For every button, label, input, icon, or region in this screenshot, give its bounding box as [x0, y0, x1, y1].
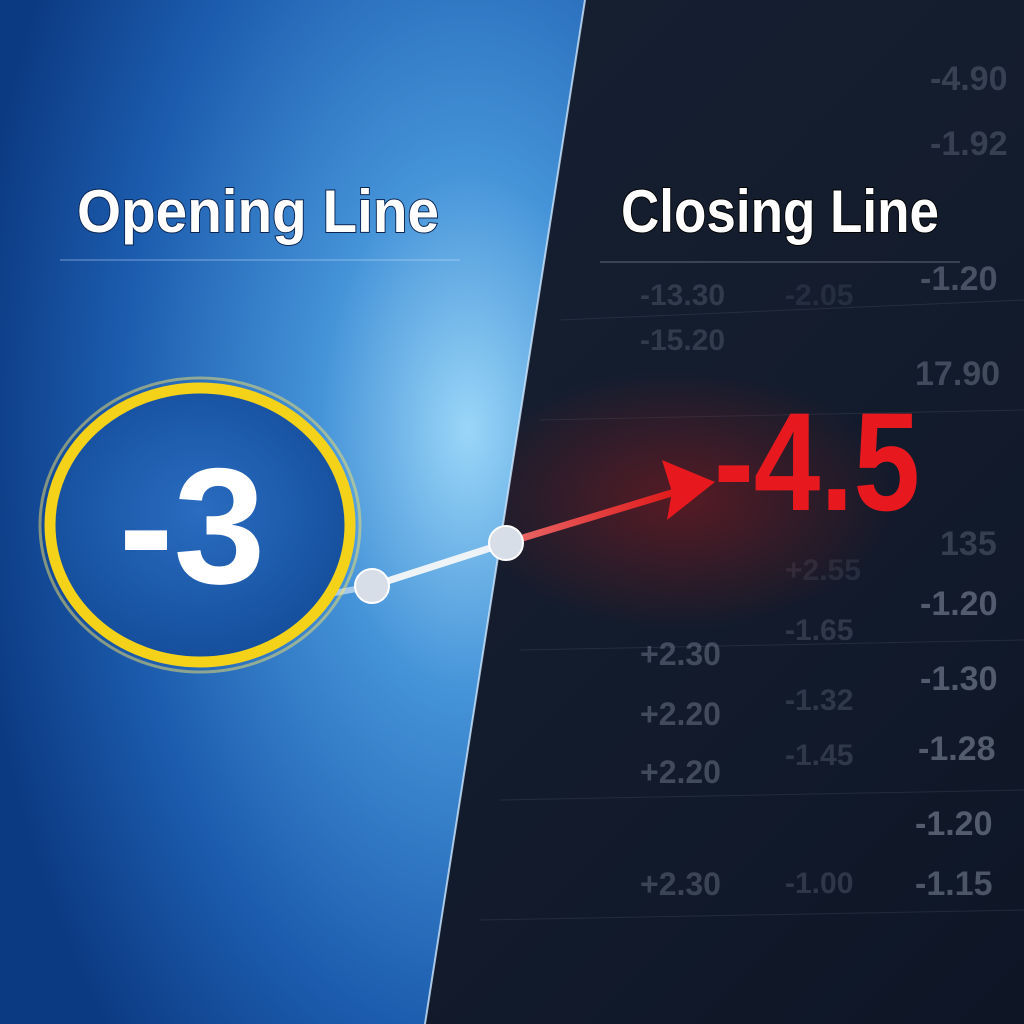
odds board numbers: +2.55 — [785, 554, 861, 587]
line movement arrow — [270, 460, 715, 605]
odds board numbers: +2.30 — [640, 866, 721, 902]
odds board numbers: -1.00 — [785, 867, 853, 900]
odds board numbers: -1.65 — [785, 614, 853, 647]
odds board numbers — [640, 60, 1008, 903]
odds board numbers: +2.20 — [640, 754, 721, 790]
odds board numbers: -1.28 — [918, 730, 996, 768]
odds board numbers: -4.90 — [930, 60, 1008, 98]
odds board numbers: -1.20 — [920, 585, 998, 623]
odds board numbers: -1.20 — [915, 805, 992, 843]
panel: opening line blue side — [0, 0, 585, 1024]
odds board numbers: +2.30 — [640, 636, 721, 672]
odds board numbers: -15.20 — [640, 324, 725, 357]
odds board numbers: -1.30 — [920, 660, 998, 698]
odds board numbers: -1.20 — [920, 260, 998, 298]
odds board numbers: 135 — [940, 525, 997, 563]
badge: opening value -3: -3 — [119, 434, 265, 618]
red glow behind closing value — [460, 370, 900, 630]
odds board numbers: -1.15 — [915, 865, 992, 903]
odds board numbers: -1.92 — [930, 125, 1008, 163]
odds board numbers: 17.90 — [915, 355, 1000, 393]
heading: Closing Line: Closing Line — [621, 178, 939, 245]
badge: opening value -3 — [40, 378, 360, 672]
closing value -4.5: -4.5 — [714, 383, 920, 540]
heading: Opening Line: Opening Line — [77, 178, 439, 245]
odds board numbers: -1.45 — [785, 739, 853, 772]
odds board numbers: +2.20 — [640, 696, 721, 732]
odds board numbers: -2.05 — [785, 279, 853, 312]
odds board numbers: -13.30 — [640, 279, 725, 312]
odds board numbers: -1.32 — [785, 684, 853, 717]
